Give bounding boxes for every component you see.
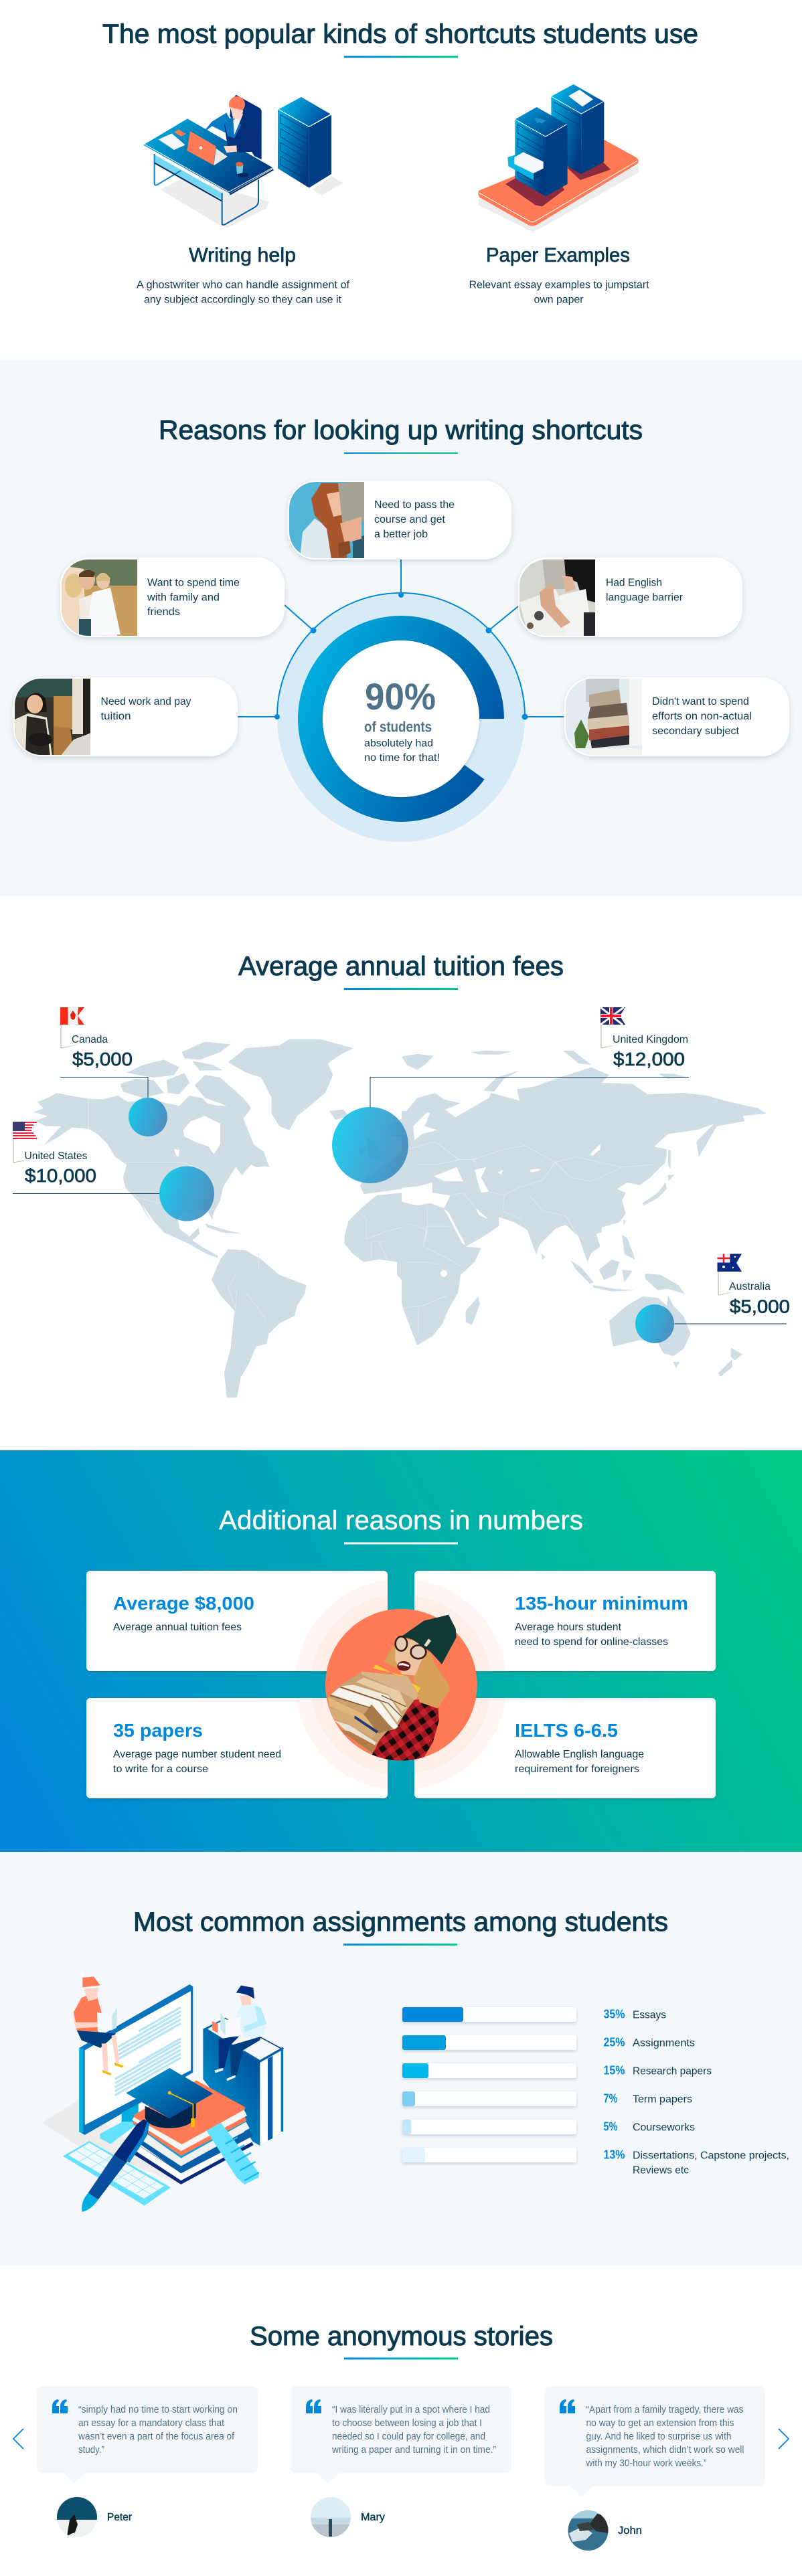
callout: Canada: $5,000 xyxy=(72,1049,133,1069)
text: family and friends: Want to spend time xyxy=(147,577,240,589)
text: of students: of students xyxy=(364,719,432,735)
stat card: papers: Average page number student need xyxy=(113,1749,281,1760)
callout: United States: $10,000 xyxy=(25,1165,96,1186)
text: Mary quote: needed so I could pay for college, and xyxy=(332,2431,485,2442)
text: pass the course: a better job xyxy=(374,529,428,540)
text: donut caption xyxy=(364,738,440,764)
name: Mary: Mary xyxy=(361,2512,385,2523)
text: Peter quote: “simply had no time to start working on xyxy=(78,2405,238,2415)
title: tuition fees: Average annual tuition fees xyxy=(238,952,564,981)
chart: 90 percent donut xyxy=(277,593,525,842)
illustration: student carrying books xyxy=(325,1609,477,1762)
text: pass the course xyxy=(374,499,455,540)
title: additional reasons: Additional reasons in numbers xyxy=(219,1506,583,1535)
section: popular shortcuts xyxy=(0,0,802,360)
text: family and friends: friends xyxy=(147,606,180,618)
stat card: papers: 35 papers xyxy=(113,1720,203,1741)
stat card: average cost: Average annual tuition fees xyxy=(113,1622,242,1633)
avatar: Mary xyxy=(311,2497,351,2538)
arrow: next xyxy=(779,2429,789,2449)
text: Peter quote: study.” xyxy=(78,2445,104,2456)
stat card: IELTS xyxy=(414,1698,716,1798)
bar: courseworks: 5% xyxy=(604,2120,617,2134)
icon: quote mark xyxy=(306,2399,321,2413)
world map xyxy=(33,1039,767,1397)
title: reasons: Reasons for looking up writing shortcuts xyxy=(159,416,643,445)
icon: quote mark xyxy=(560,2399,575,2413)
bar: courseworks xyxy=(402,2120,695,2134)
text: English language barrier: language barrier xyxy=(606,592,684,604)
section: average annual tuition fees xyxy=(0,896,802,1450)
card: family and friends xyxy=(60,557,285,638)
callout: Australia: $5,000 xyxy=(730,1296,790,1317)
speech bubble xyxy=(37,2386,258,2483)
stat card: hours: 135-hour minimum xyxy=(515,1593,688,1614)
bar: dissertations xyxy=(402,2148,789,2176)
text: work and pay tuition: Need work and pay xyxy=(100,696,191,707)
section: additional reasons in numbers xyxy=(0,1450,802,1852)
stat card: hours xyxy=(414,1571,716,1671)
card: work and pay tuition xyxy=(13,677,238,756)
stat card: papers: to write for a course xyxy=(113,1764,208,1775)
text: John quote xyxy=(586,2405,744,2469)
photo: woman at desk xyxy=(518,557,595,637)
text: Mary quote: to choose between losing a job that I xyxy=(332,2418,482,2429)
text: paper examples description: Relevant essay examples to jumpstart xyxy=(469,280,649,290)
story: John xyxy=(544,2386,765,2552)
callout: United Kingdom: $12,000 xyxy=(613,1049,685,1069)
text: John quote: no way to get an extension from this xyxy=(586,2418,734,2429)
section: anonymous stories xyxy=(12,2325,790,2551)
bar: research papers xyxy=(402,2063,712,2078)
avatar: Peter xyxy=(57,2497,97,2539)
text: English language barrier: Had English xyxy=(606,577,662,589)
text: Mary quote: “I was literally put in a spot where I had xyxy=(332,2405,490,2415)
flag: Canada xyxy=(60,1007,84,1048)
stat card: hours: Average hours student xyxy=(515,1622,622,1633)
stat card: papers xyxy=(86,1698,388,1798)
text: family and friends: with family and xyxy=(147,592,220,604)
text: Mary quote: writing a paper and turning it in on time.” xyxy=(331,2445,496,2456)
bar: dissertations: Reviews etc xyxy=(633,2164,689,2176)
text: Mary quote xyxy=(331,2405,496,2456)
stat card: average cost: Average $8,000 xyxy=(113,1593,254,1614)
text: work and pay tuition: tuition xyxy=(100,711,131,722)
heading: paper examples: Paper Examples xyxy=(486,244,630,266)
story: Peter xyxy=(37,2386,258,2539)
bar: research papers: 15% xyxy=(604,2064,625,2077)
callout: Australia xyxy=(635,1254,790,1343)
heading: writing help: Writing help xyxy=(189,244,296,266)
text: Peter quote: an essay for a mandatory class that xyxy=(78,2418,224,2429)
text: non-actual secondary subject: efforts on non-actual xyxy=(652,711,752,722)
name: John: John xyxy=(618,2525,642,2537)
name: Peter: Peter xyxy=(107,2512,133,2523)
bar: term papers: Term papers xyxy=(633,2093,692,2106)
text: John quote: guy. And he liked to surprise us with xyxy=(586,2431,731,2442)
text: writing help description xyxy=(137,280,350,305)
avatar: John xyxy=(568,2510,609,2552)
stat: 90 percent: 90% xyxy=(365,675,436,717)
callout: United Kingdom xyxy=(332,1007,689,1183)
arrow: previous xyxy=(13,2429,23,2449)
text: pass the course: course and get xyxy=(374,514,446,525)
photo: family xyxy=(60,557,137,638)
section: reasons for looking up writing shortcuts xyxy=(0,360,802,896)
text: non-actual secondary subject: secondary subject xyxy=(652,725,740,737)
text: work and pay tuition xyxy=(100,696,191,722)
text: non-actual secondary subject xyxy=(652,696,752,737)
bar: research papers: Research papers xyxy=(633,2065,712,2077)
text: donut caption: no time for that! xyxy=(364,752,440,764)
stat card: IELTS: requirement for foreigners xyxy=(515,1764,639,1775)
callout: United States: United States xyxy=(24,1150,87,1162)
text: non-actual secondary subject: Didn't want to spend xyxy=(652,696,749,707)
text: paper examples description xyxy=(469,280,649,305)
stat card: IELTS: Allowable English language xyxy=(515,1749,644,1760)
text: Peter quote xyxy=(78,2405,238,2456)
text: writing help description: any subject accordingly so they can use it xyxy=(144,294,342,305)
section: most common assignments xyxy=(0,1852,802,2265)
bar: term papers: 7% xyxy=(604,2092,617,2106)
callout: Australia: Australia xyxy=(729,1281,771,1292)
illustration: filing cabinets on a tablet xyxy=(478,84,639,232)
stat card: hours: need to spend for online-classes xyxy=(515,1636,668,1648)
text: Peter quote: wasn’t even a part of the focus area of xyxy=(78,2431,235,2442)
speech bubble xyxy=(291,2386,511,2483)
connectors from cards to donut xyxy=(238,560,564,720)
text: John quote: assignments, which didn’t work so well xyxy=(586,2445,744,2456)
flag: United Kingdom xyxy=(600,1007,625,1048)
bar: dissertations: Dissertations, Capstone projects, xyxy=(633,2150,789,2162)
icon: quote mark xyxy=(52,2399,68,2413)
stat card: IELTS: IELTS 6-6.5 xyxy=(515,1720,618,1741)
bar: assignments: 25% xyxy=(604,2036,625,2049)
decorative rings on cards xyxy=(295,1579,507,1790)
title: anonymous stories: Some anonymous stories xyxy=(250,2322,553,2351)
bar: assignments xyxy=(402,2035,695,2050)
callout: United States xyxy=(13,1122,214,1221)
callout: Canada: Canada xyxy=(72,1034,108,1045)
photo: woman reading xyxy=(288,481,365,560)
text: John quote: with my 30-hour work weeks.” xyxy=(586,2458,707,2469)
text: pass the course: Need to pass the xyxy=(374,499,455,511)
illustration: person writing at desk with cabinet xyxy=(143,95,343,228)
card: English language barrier xyxy=(518,557,742,637)
callout: Canada xyxy=(60,1007,167,1136)
title: common assignments: Most common assignments among students xyxy=(133,1907,668,1937)
callout: United Kingdom: United Kingdom xyxy=(613,1034,688,1045)
text: paper examples description: own paper xyxy=(534,294,584,305)
text: writing help description: A ghostwriter who can handle assignment of xyxy=(137,280,350,290)
bar: term papers xyxy=(402,2091,692,2106)
text: John quote: “Apart from a family tragedy, there was xyxy=(586,2405,743,2415)
card: non-actual secondary subject xyxy=(564,677,789,756)
bar chart: assignment shares xyxy=(402,2007,789,2176)
stat card: average cost xyxy=(86,1571,388,1671)
story: Mary xyxy=(291,2386,511,2538)
speech bubble xyxy=(544,2386,765,2496)
bar: essays xyxy=(402,2007,666,2022)
bar: essays: Essays xyxy=(633,2009,666,2021)
flag: Australia xyxy=(718,1254,742,1295)
illustration: students on monitor and books xyxy=(42,1972,283,2212)
photo: waitress xyxy=(13,677,91,756)
title: popular kinds of shortcuts: The most popular kinds of shortcuts students use xyxy=(102,19,698,49)
bar: assignments: Assignments xyxy=(633,2037,695,2049)
text: English language barrier xyxy=(606,577,684,604)
bar: courseworks: Courseworks xyxy=(633,2122,695,2134)
card: pass the course xyxy=(288,481,511,560)
photo: stack of books xyxy=(564,677,642,756)
bar: essays: 35% xyxy=(604,2008,625,2021)
text: donut caption: absolutely had xyxy=(364,738,433,750)
bar: dissertations: 13% xyxy=(604,2148,625,2162)
flag: United States xyxy=(13,1122,37,1163)
text: family and friends xyxy=(147,577,240,618)
